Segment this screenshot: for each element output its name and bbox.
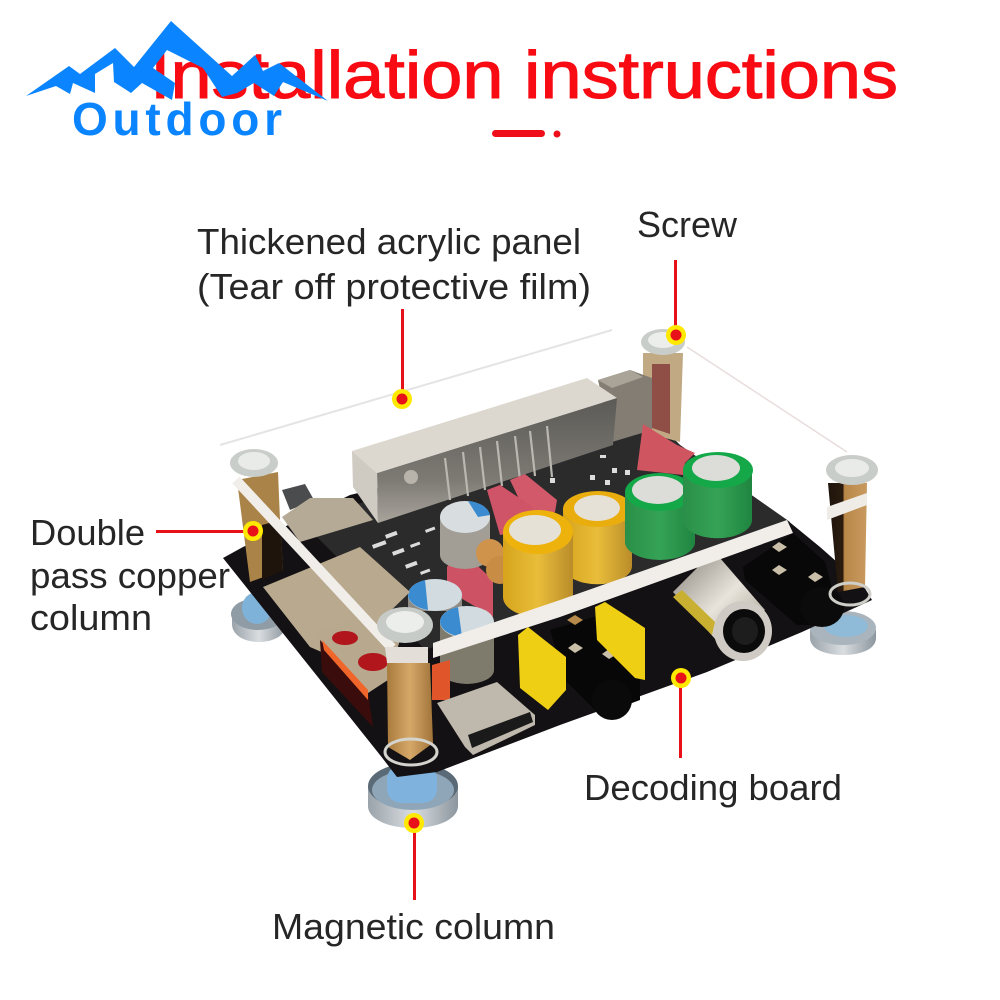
jacks, black housing [550, 533, 844, 720]
circuit board [223, 420, 872, 777]
label: double pass copper column: column [30, 597, 152, 638]
title [150, 39, 898, 138]
acrylic panel [220, 330, 867, 658]
label: double pass copper column: pass copper [30, 555, 230, 596]
yellow film capacitors [518, 602, 645, 710]
label: magnetic column [272, 813, 555, 947]
brass column front [377, 607, 437, 765]
label: acrylic panel [197, 221, 591, 409]
brass column left [230, 449, 283, 582]
USB-C port [437, 682, 535, 755]
label: acrylic panel: Thickened acrylic panel [197, 221, 581, 262]
silver and blue capacitors [408, 501, 514, 684]
product photo: decoding board in acrylic case [220, 329, 878, 828]
label: double pass copper column: Double [30, 512, 145, 553]
label: screw [637, 204, 738, 345]
brass column right [826, 455, 878, 605]
battery holder [282, 484, 373, 542]
label: screw: Screw [637, 204, 738, 245]
rear screw [641, 329, 685, 355]
label: double pass copper column [30, 512, 263, 638]
rear brass column [643, 353, 683, 442]
magnetic foot rear left [231, 592, 286, 642]
logo: Outdoor mountains: Outdoor [72, 93, 282, 145]
USB port shield [263, 547, 410, 660]
logo: Outdoor mountains [26, 21, 328, 145]
red film capacitors [447, 424, 695, 617]
green electrolytic capacitors [625, 452, 753, 560]
label: decoding board: Decoding board [584, 767, 842, 808]
magnetic foot front [368, 763, 458, 828]
grey connector block [352, 378, 617, 523]
yellow electrolytic capacitors [503, 491, 633, 617]
title: Installation instructions [150, 39, 898, 113]
rear optical connector [598, 370, 652, 442]
magnetic foot rear right [810, 611, 876, 655]
label: decoding board [584, 668, 842, 808]
USB-A port [317, 613, 450, 727]
label: acrylic panel: (Tear off protective film) [197, 266, 591, 307]
RCA socket [673, 558, 772, 661]
label: magnetic column: Magnetic column [272, 906, 555, 947]
